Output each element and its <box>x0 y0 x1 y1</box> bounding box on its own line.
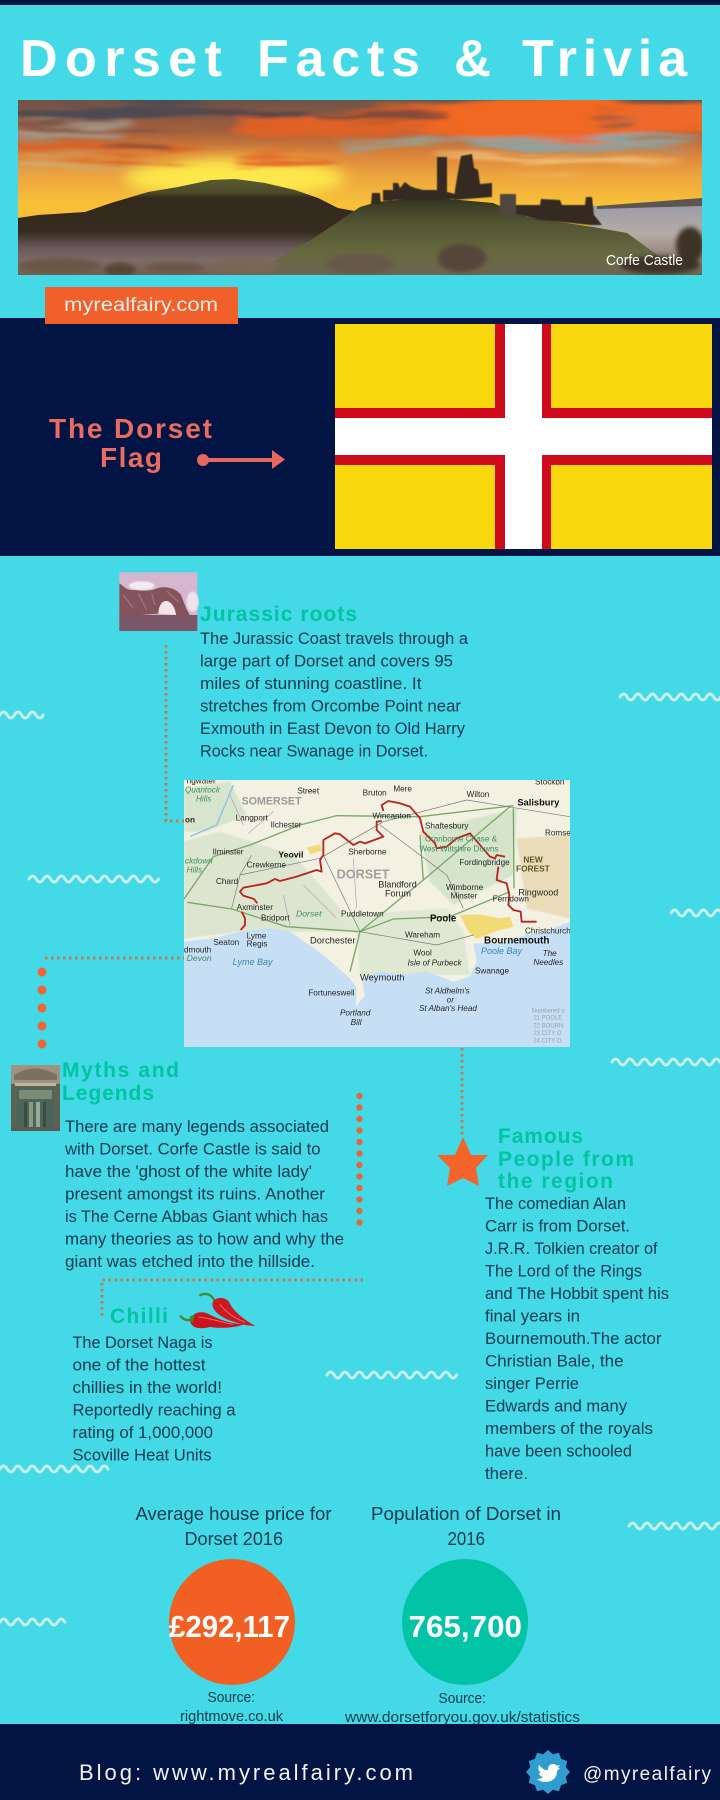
place names: Swanage <box>475 966 509 975</box>
footer background <box>0 1724 720 1800</box>
place names: SOMERSET <box>242 795 302 807</box>
body text <box>64 1117 344 1271</box>
place names: 23 CITY O <box>533 1031 562 1037</box>
place names: Minster <box>451 891 478 900</box>
title: Trivia <box>522 30 688 88</box>
orange circle <box>169 1559 295 1685</box>
flag heading <box>49 413 212 473</box>
land tints <box>184 782 570 975</box>
place names: Regis <box>247 940 268 949</box>
body text: There are many legends associated <box>65 1117 329 1136</box>
heading: Myths and <box>62 1059 179 1082</box>
body text: rating of 1,000,000 <box>72 1423 213 1442</box>
value: £292,117 <box>169 1609 290 1644</box>
place names: Chard <box>216 877 239 886</box>
flag of Dorset <box>335 324 712 549</box>
stat caption: Average house price for <box>136 1504 332 1524</box>
panel: footer <box>0 1724 720 1800</box>
place names: or <box>447 996 454 1005</box>
place names: West Wiltshire Downs <box>419 845 499 854</box>
icon: Durdle Door arch photo <box>119 572 199 631</box>
website badge: myrealfairy.com <box>64 295 218 316</box>
castle ruins <box>371 154 602 225</box>
section: Myths and Legends <box>62 1059 344 1271</box>
caption: Corfe Castle <box>606 253 683 269</box>
source: Source: <box>438 1691 486 1707</box>
source: www.dorsetforyou.gov.uk/statistics <box>344 1710 580 1726</box>
place names: Mere <box>393 785 412 794</box>
place names: Needles <box>533 958 563 967</box>
flag heading: The Dorset <box>49 413 212 444</box>
place names: dmouth <box>184 945 211 954</box>
place names: Numbered u <box>532 1008 565 1014</box>
stat caption <box>371 1504 561 1549</box>
place names: Dorset <box>296 909 322 919</box>
body text: have been schooled <box>485 1442 632 1460</box>
source: Source: <box>208 1690 255 1706</box>
title <box>20 30 688 88</box>
place names: Wilton <box>467 790 489 799</box>
body text: many theories as to how and why the <box>65 1230 344 1248</box>
body text: J.R.R. Tolkien creator of <box>485 1239 658 1258</box>
green circle <box>402 1559 528 1685</box>
place names: 22 BOURN <box>533 1023 563 1029</box>
place names: Blandford <box>378 879 417 889</box>
place names: St Alban's Head <box>419 1004 477 1013</box>
source: rightmove.co.uk <box>180 1709 284 1725</box>
place names: Cranborne Chase & <box>425 835 498 844</box>
place names: Ilminster <box>213 847 244 856</box>
place names: Crewkerne <box>247 861 287 870</box>
place names: Forum <box>385 889 411 899</box>
place names: Stockbri <box>535 777 565 786</box>
body text <box>72 1333 236 1464</box>
body text: final years in <box>485 1306 580 1326</box>
body text <box>485 1194 669 1483</box>
heading: Jurassic roots <box>200 603 357 626</box>
body text: miles of stunning coastline. It <box>200 674 422 693</box>
place names: Street <box>297 786 320 795</box>
heading: Famous <box>498 1125 583 1148</box>
body text: one of the hottest <box>72 1356 206 1374</box>
heading <box>498 1125 634 1193</box>
urban areas <box>460 914 513 939</box>
title: & <box>454 30 491 88</box>
place names: Salisbury <box>517 798 560 808</box>
top navy strip <box>0 0 720 5</box>
place names: Wincanton <box>372 811 411 820</box>
foreground bushes <box>18 227 704 277</box>
place names: Ferndown <box>493 895 529 904</box>
roads <box>184 806 514 972</box>
icon: twitter badge <box>526 1750 570 1794</box>
place names: Weymouth <box>360 973 404 983</box>
body text: Rocks near Swanage in Dorset. <box>200 742 428 760</box>
place names: Seaton <box>213 938 239 947</box>
place names <box>184 776 571 1045</box>
place names: Romse <box>545 829 571 838</box>
place names: Wool <box>413 949 432 958</box>
place names: Shaftesbury <box>425 821 469 830</box>
far ridge and mist <box>590 206 702 276</box>
sky glow <box>125 158 345 198</box>
place names: Lyme Bay <box>233 957 273 967</box>
section: Chilli <box>72 1294 255 1464</box>
place names: Lyme <box>247 931 267 940</box>
place names: The <box>543 949 557 958</box>
heading <box>62 1059 179 1105</box>
sea <box>184 922 570 1047</box>
source <box>344 1691 580 1726</box>
place names: Christchurch <box>525 926 571 935</box>
heading: Legends <box>62 1082 154 1105</box>
body text: Edwards and many <box>485 1396 628 1416</box>
place names: Bruton <box>363 789 387 798</box>
stat caption: Dorset 2016 <box>184 1529 283 1549</box>
section: Famous People <box>485 1125 669 1483</box>
place names: Yeovil <box>278 850 303 860</box>
body text: Scoville Heat Units <box>72 1446 212 1464</box>
place names: Quantock <box>185 785 221 794</box>
photo: Corfe Castle at sunset <box>18 100 702 275</box>
body text: giant was etched into the hillside. <box>65 1252 315 1271</box>
body text: The comedian Alan <box>485 1194 626 1213</box>
body text: Carr is from Dorset. <box>485 1216 630 1236</box>
place names: Poole <box>430 914 457 925</box>
twitter handle: @myrealfairy <box>583 1764 712 1785</box>
heading: the region <box>498 1170 613 1193</box>
place names: 24 CITY O <box>533 1039 562 1045</box>
place names: Dorchester <box>310 935 356 945</box>
stat: average house price <box>136 1504 332 1725</box>
panel: flag band <box>0 318 720 556</box>
place names: Ringwood <box>518 888 558 898</box>
river <box>190 785 233 837</box>
blog link: Blog: www.myrealfairy.com <box>79 1760 413 1785</box>
body text: The Jurassic Coast travels through a <box>200 629 469 648</box>
body text: The Lord of the Rings <box>485 1262 642 1280</box>
icon: carved door photo <box>11 1065 60 1131</box>
dotted connector: right of myths <box>356 1093 363 1226</box>
body text: chillies in the world! <box>72 1378 222 1397</box>
dotted connector: big orange dots <box>38 968 46 1048</box>
body text: Exmouth in East Devon to Old Harry <box>200 719 466 738</box>
place names: Wareham <box>405 931 440 940</box>
place names: 21 POOLE <box>533 1015 562 1021</box>
body text: is The Cerne Abbas Giant which has <box>65 1207 328 1226</box>
band background <box>0 318 720 556</box>
place names: Wimborne <box>446 883 484 892</box>
icon: red chillies <box>180 1294 255 1328</box>
flag heading: Flag <box>100 442 162 473</box>
place names: FOREST <box>516 864 550 874</box>
place names: on <box>185 815 195 824</box>
body text: and The Hobbit spent his <box>485 1284 669 1303</box>
arrow to flag <box>197 450 285 469</box>
place names: Ilchester <box>271 821 302 830</box>
body text: there. <box>485 1464 528 1483</box>
place names: Bill <box>351 1018 362 1027</box>
place names: Sherborne <box>348 847 387 856</box>
place names: Portland <box>340 1009 371 1018</box>
place names: Bournemouth <box>484 936 549 947</box>
sky <box>18 100 702 226</box>
place names: St Aldhelm's <box>425 987 470 996</box>
clouds <box>18 100 702 178</box>
heading: Chilli <box>110 1305 168 1328</box>
body text: stretches from Orcombe Point near <box>200 696 461 716</box>
place names: Axminster <box>237 903 273 912</box>
icon: orange star <box>437 1137 488 1186</box>
place names: Bridport <box>261 914 290 923</box>
body text: Bournemouth.The actor <box>485 1329 662 1348</box>
map of Dorset <box>184 776 571 1047</box>
place names: Devon <box>187 953 212 963</box>
place names: Hills <box>196 795 211 804</box>
place names: Fortuneswell <box>308 989 355 998</box>
title: Dorset <box>20 30 222 88</box>
title: Facts <box>257 30 420 88</box>
place names: Poole Bay <box>481 946 522 956</box>
value: 765,700 <box>408 1609 522 1644</box>
place names: Langport <box>236 814 269 823</box>
place names: ngwater <box>187 776 216 785</box>
place names: NEW <box>523 854 543 864</box>
body text: Christian Bale, the <box>485 1352 624 1370</box>
long-distance route <box>240 801 537 930</box>
body text: have the 'ghost of the white lady' <box>65 1162 312 1181</box>
left hill <box>18 179 370 275</box>
body text: Reportedly reaching a <box>72 1400 236 1420</box>
right hill <box>272 199 662 275</box>
body text: The Dorset Naga is <box>72 1333 212 1352</box>
stat caption: 2016 <box>448 1529 485 1549</box>
body text: members of the royals <box>485 1419 653 1438</box>
body text: large part of Dorset and covers 95 <box>200 652 453 670</box>
place names: Isle of Purbeck <box>408 959 463 968</box>
place names: Fordingbridge <box>459 858 510 867</box>
stat caption: Population of Dorset in <box>371 1504 561 1524</box>
source <box>180 1690 284 1725</box>
body text: singer Perrie <box>485 1374 579 1393</box>
place names: DORSET <box>337 867 390 881</box>
body text: present amongst its ruins. Another <box>65 1184 325 1204</box>
heading: People from <box>498 1148 634 1171</box>
place names: Puddletown <box>341 910 384 919</box>
body text: with Dorset. Corfe Castle is said to <box>64 1140 321 1158</box>
stat: population <box>344 1504 580 1726</box>
place names: Hills <box>187 865 202 874</box>
body text <box>200 629 469 760</box>
section: Jurassic roots <box>200 603 469 760</box>
place names: ckdown <box>185 856 213 865</box>
website badge <box>45 287 238 324</box>
stat caption <box>136 1504 332 1549</box>
